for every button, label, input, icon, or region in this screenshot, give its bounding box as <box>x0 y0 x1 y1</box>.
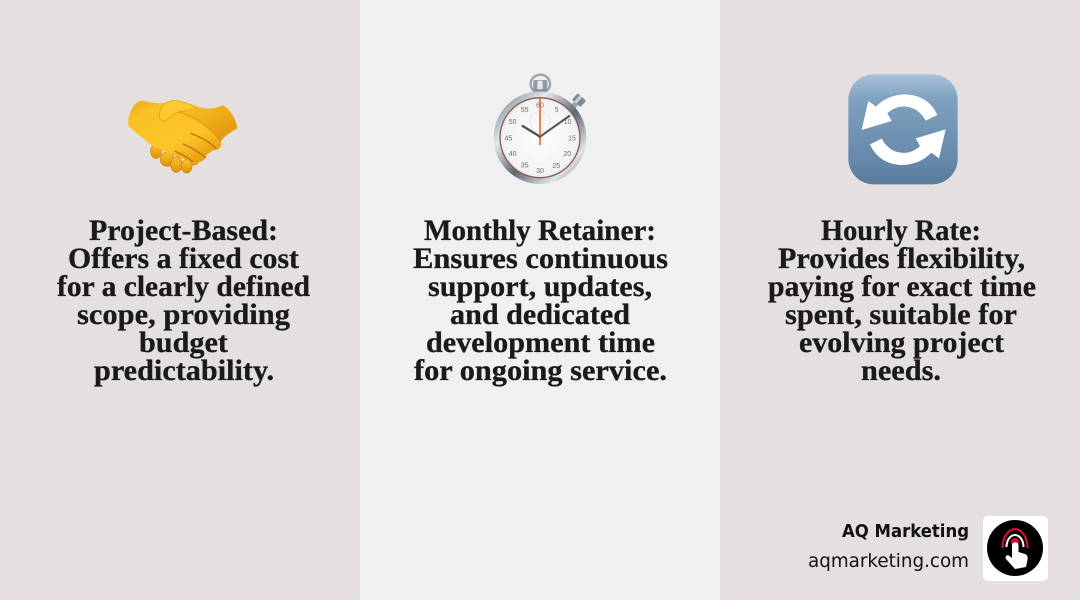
icon: stopwatch: 35 <box>521 163 529 170</box>
panel: monthly retainer background <box>360 0 720 600</box>
text: project-based: for a clearly defined <box>57 270 310 303</box>
text: monthly retainer: Ensures continuous <box>413 242 668 275</box>
text: hourly rate: Provides flexibility, <box>778 242 1025 275</box>
text: hourly rate: paying for exact time <box>768 270 1036 303</box>
text: monthly retainer <box>413 214 668 387</box>
text: hourly rate <box>768 214 1036 387</box>
icon: stopwatch: 40 <box>509 151 517 158</box>
icon: stopwatch: 5 <box>555 107 559 114</box>
icon: stopwatch: 60 <box>536 102 544 109</box>
text: hourly rate: Hourly Rate: <box>821 214 981 247</box>
icon: stopwatch: 50 <box>509 119 517 126</box>
text: monthly retainer: Monthly Retainer: <box>424 214 656 247</box>
icon: stopwatch: 55 <box>521 107 529 114</box>
icon: stopwatch: 10 <box>564 119 572 126</box>
text: monthly retainer: and dedicated <box>450 298 630 331</box>
icon: stopwatch: 25 <box>552 163 560 170</box>
text: hourly rate: evolving project <box>799 326 1004 359</box>
panel: project-based background <box>0 0 360 600</box>
text: project-based: budget <box>139 326 228 359</box>
panel: hourly rate background <box>720 0 1080 600</box>
icon: stopwatch: 45 <box>504 135 512 142</box>
footer brand text: AQ Marketing <box>842 521 969 542</box>
text: project-based: scope, providing <box>77 298 290 331</box>
footer brand text <box>808 521 969 572</box>
text: monthly retainer: development time <box>426 326 655 359</box>
icon: handshake <box>128 101 237 173</box>
icon: stopwatch: 30 <box>536 168 544 175</box>
icon: brand logo <box>983 516 1048 581</box>
icon: stopwatch: 20 <box>563 151 571 158</box>
text: project-based: Offers a fixed cost <box>68 242 299 275</box>
icon: stopwatch: 15 <box>568 135 576 142</box>
footer brand text: aqmarketing.com <box>808 550 969 572</box>
text: project-based: Project-Based: <box>89 214 278 247</box>
text: project-based <box>57 214 310 387</box>
icon: refresh arrows <box>848 74 958 184</box>
text: monthly retainer: for ongoing service. <box>414 354 667 387</box>
text: monthly retainer: support, updates, <box>428 270 652 303</box>
text: hourly rate: spent, suitable for <box>785 298 1017 331</box>
text: hourly rate: needs. <box>861 354 941 387</box>
icon: stopwatch <box>494 75 586 184</box>
text: project-based: predictability. <box>94 354 274 387</box>
